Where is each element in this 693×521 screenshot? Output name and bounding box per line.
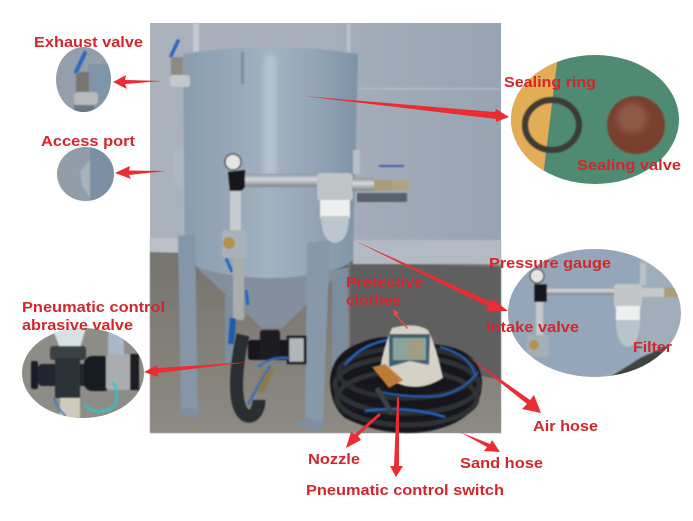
label: filter: Filter <box>633 339 672 356</box>
sealing ring <box>525 100 579 150</box>
arrow: air hose <box>466 355 541 413</box>
inset: access port <box>57 147 114 201</box>
tank body <box>183 47 358 328</box>
arrow: nozzle <box>346 413 381 448</box>
label: exhaust valve: Exhaust valve <box>34 34 143 51</box>
inset: pressure gauge, intake valve, filter <box>508 249 681 377</box>
label: sealing ring: Sealing ring <box>504 74 596 91</box>
arrow: protective clothes <box>393 309 408 329</box>
hose coil <box>330 337 482 433</box>
air filter <box>317 173 353 243</box>
abrasive valve and hose <box>236 330 305 416</box>
air pipework <box>222 154 319 344</box>
exhaust valve on tank <box>170 41 190 87</box>
label: access port: Access port <box>41 133 135 150</box>
intake ball valve <box>352 150 409 202</box>
label: intake valve: Intake valve <box>486 319 579 336</box>
nozzle and switch <box>372 364 403 414</box>
arrow: access port <box>115 166 166 179</box>
label: sand hose: Sand hose <box>460 455 543 472</box>
label: air hose: Air hose <box>533 418 598 435</box>
arrow: abrasive valve <box>144 362 250 377</box>
arrow: sealing parts <box>303 96 509 122</box>
inset: exhaust valve <box>56 47 111 113</box>
panel: main machine photo <box>150 23 501 433</box>
arrow: pneumatic control switch <box>390 397 403 477</box>
inset: sealing ring and sealing valve <box>511 55 679 185</box>
arrow: sand hose <box>460 432 500 452</box>
protective hood <box>380 325 443 387</box>
label: protective clothes: Pretective <box>346 274 423 291</box>
label: pneumatic control abrasive valve: abrasive valve <box>22 317 133 334</box>
front legs <box>176 234 330 432</box>
label: pneumatic control switch: Pneumatic control switch <box>306 482 504 499</box>
inset: pneumatic control abrasive valve <box>22 328 144 418</box>
back legs <box>225 265 348 370</box>
arrow: exhaust valve <box>113 75 162 89</box>
label: nozzle: Nozzle <box>308 451 360 468</box>
label: protective clothes: clothes <box>346 292 401 309</box>
arrow: intake valve <box>353 240 508 311</box>
label: pneumatic control abrasive valve: Pneumatic control <box>22 299 165 316</box>
access port on tank <box>173 146 183 190</box>
label: sealing valve: Sealing valve <box>577 157 681 174</box>
sealing valve <box>607 96 665 154</box>
label: pressure gauge: Pressure gauge <box>489 255 611 272</box>
